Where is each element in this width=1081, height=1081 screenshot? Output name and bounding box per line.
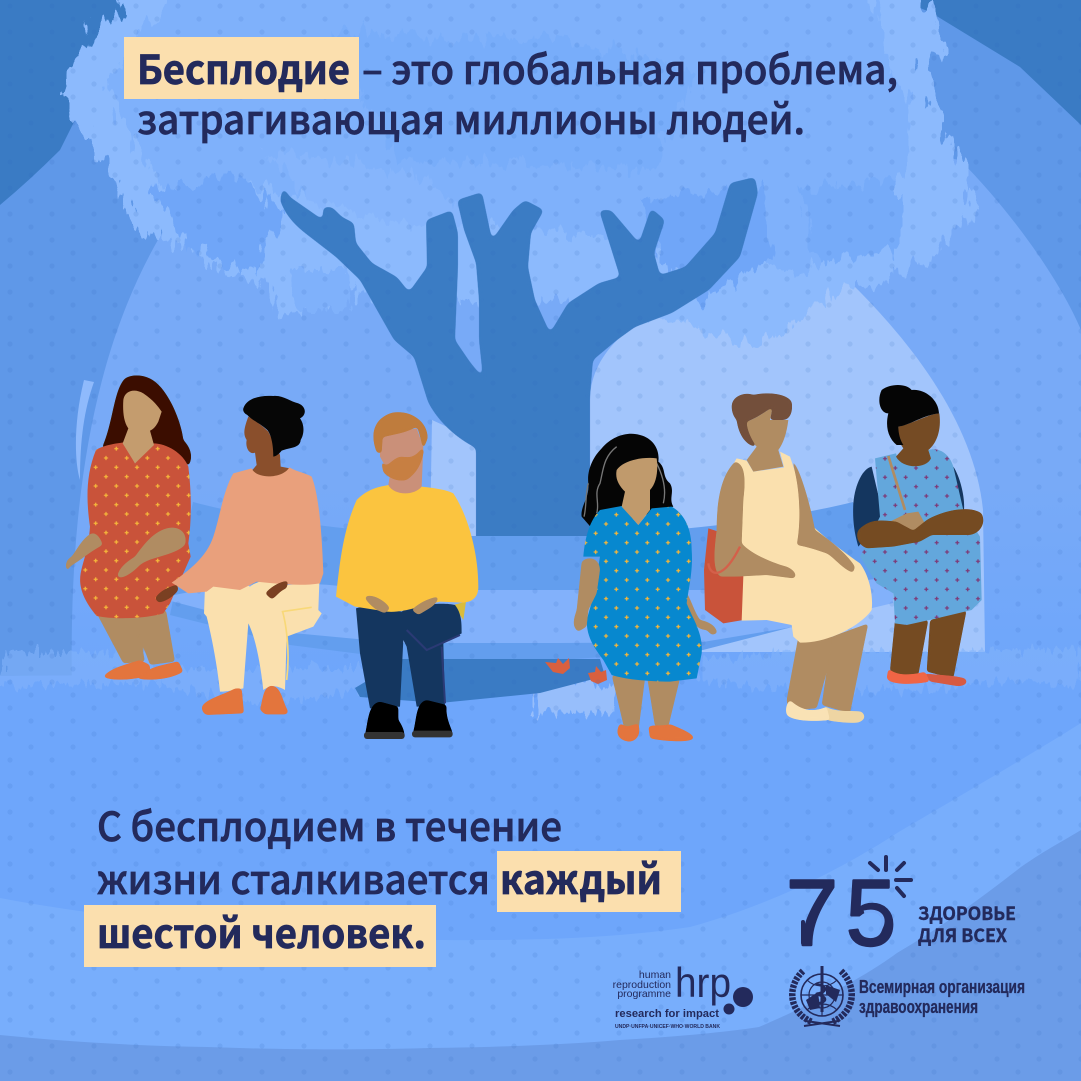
bench shadow	[355, 659, 605, 703]
logo: hrp: reproduction	[613, 979, 671, 991]
logo: WHO emblem	[792, 966, 852, 1026]
logo: hrp: research for impact	[615, 1008, 719, 1020]
logo: hrp: human	[639, 969, 671, 981]
person: woman in light blue dress	[853, 385, 983, 686]
ground	[0, 674, 1081, 1081]
heading: top statement: Бесплодие	[137, 38, 350, 96]
heading: top statement: затрагивающая миллионы людей.	[137, 88, 805, 146]
person: woman in peach sweater	[155, 396, 323, 715]
logo: hrp	[613, 959, 753, 1030]
heading: top statement	[124, 37, 898, 146]
bench	[167, 502, 893, 660]
tree canopy	[63, 0, 972, 345]
grass	[0, 648, 1081, 704]
text block: one in six: шестой человек.	[97, 902, 426, 960]
text block: one in six: каждый	[500, 848, 662, 906]
flowers	[545, 658, 607, 684]
person: woman in cream dress	[704, 393, 872, 723]
logo: hrp: hrp	[675, 959, 731, 1006]
logo: hrp: UNDP·UNFPA·UNICEF·WHO·WORLD BANK	[615, 1024, 720, 1030]
heading: top statement: – это глобальная проблема,	[362, 38, 898, 96]
logo: 75 health for all: ЗДОРОВЬЕ	[918, 900, 1016, 926]
grass tuft: centre	[532, 680, 614, 714]
text: WHO name: Всемирная организация	[859, 977, 1025, 997]
text block: one in six	[84, 795, 681, 967]
person: woman in red dress	[66, 375, 191, 680]
logo: 75 health for all	[786, 857, 1016, 965]
logo: hrp: programme	[617, 988, 671, 1000]
logo: 75 health for all: ДЛЯ ВСЕХ	[918, 922, 1008, 948]
logo: 75 health for all: 7	[786, 860, 838, 965]
text block: one in six: жизни сталкивается	[97, 848, 490, 906]
person: woman in blue dress	[574, 434, 717, 742]
tree trunk	[280, 177, 758, 550]
text block: one in six: С бесплодием в течение	[97, 795, 562, 853]
person: man in yellow sweater	[336, 412, 478, 739]
text: WHO name: здравоохранения	[859, 997, 978, 1017]
text: WHO name	[859, 977, 1025, 1017]
logo: 75 health for all: 5	[846, 860, 896, 965]
